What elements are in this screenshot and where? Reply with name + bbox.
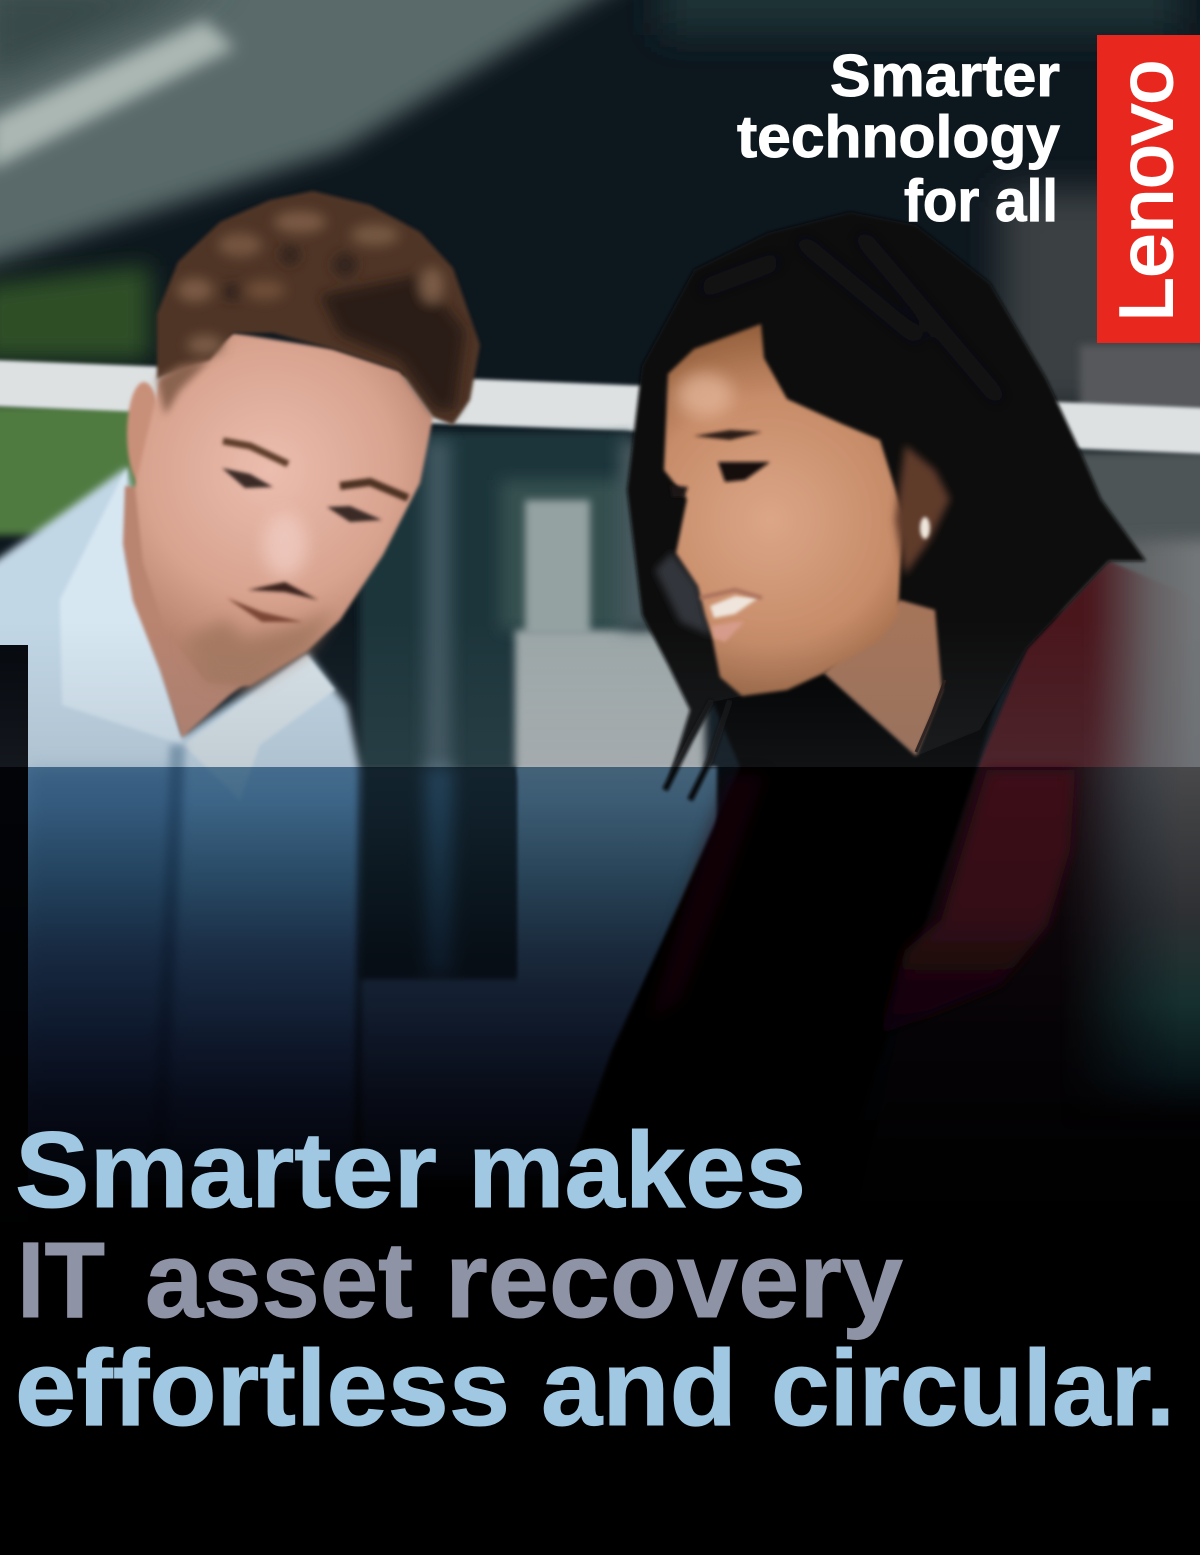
headline: makes xyxy=(468,1109,806,1230)
woman smile xyxy=(700,590,762,642)
woman necklace xyxy=(916,680,945,752)
man neck xyxy=(123,486,300,738)
man mouth xyxy=(227,582,318,622)
man face xyxy=(135,333,433,686)
woman jacket xyxy=(860,561,1200,1200)
headline xyxy=(15,1109,1175,1448)
dark gradient overlay xyxy=(0,767,1200,1555)
woman earring xyxy=(920,517,930,539)
tagline xyxy=(737,43,1060,234)
tagline: Smarter xyxy=(830,43,1060,109)
photo: office background xyxy=(0,0,1200,1178)
headline: IT xyxy=(17,1219,105,1340)
woman hair wisp xyxy=(655,552,712,636)
man ear xyxy=(127,382,161,486)
headline: asset xyxy=(145,1219,413,1340)
woman right fade xyxy=(1090,540,1200,1100)
tagline: technology xyxy=(737,104,1060,170)
headline: effortless xyxy=(15,1327,510,1448)
woman hair strands xyxy=(665,700,730,800)
woman neck xyxy=(824,600,942,756)
man nose xyxy=(263,513,307,577)
photo: man xyxy=(0,191,480,1245)
man shirt xyxy=(0,467,360,1180)
tagline: for all xyxy=(904,168,1058,234)
woman sweater xyxy=(540,673,1000,1250)
woman face xyxy=(664,324,905,696)
woman hair sheen xyxy=(700,235,1000,400)
Lenovo logo: Lenovo xyxy=(1104,60,1188,322)
woman eye xyxy=(670,430,770,497)
headline: Smarter xyxy=(15,1109,437,1230)
woman hair back xyxy=(627,212,1146,781)
photo: woman xyxy=(540,212,1200,1250)
woman forehead highlight xyxy=(677,373,733,417)
headline: circular. xyxy=(771,1327,1175,1448)
woman lower jacket xyxy=(658,766,1200,1084)
man hair xyxy=(157,191,480,425)
headline: and xyxy=(541,1327,737,1448)
headline: recovery xyxy=(445,1219,903,1340)
Lenovo logo xyxy=(1097,35,1200,343)
woman ear xyxy=(895,445,950,575)
man stubble xyxy=(185,610,335,686)
man eyes xyxy=(222,441,408,522)
